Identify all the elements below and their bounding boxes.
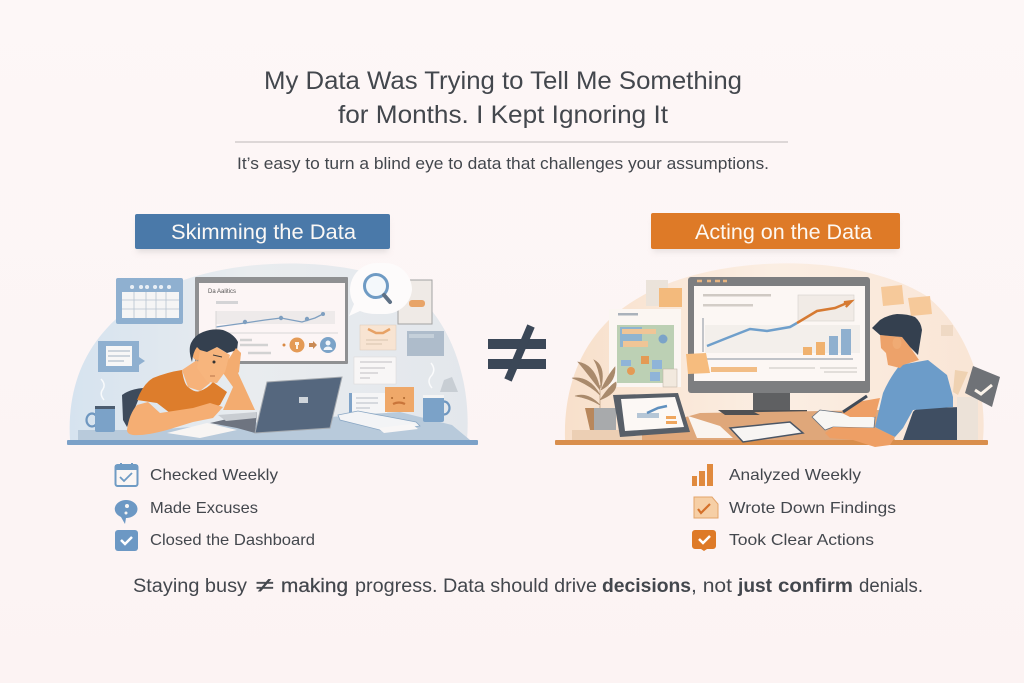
- closing statement: decisions: [602, 576, 691, 597]
- title: [264, 67, 742, 129]
- map document: [609, 309, 681, 387]
- check badge: [953, 366, 1000, 440]
- label: Took Clear Actions: [729, 532, 874, 549]
- plant: [572, 360, 616, 433]
- desk papers and sticky note: [338, 387, 420, 433]
- closing statement: Staying busy: [133, 576, 248, 597]
- checklist: acting: [692, 464, 896, 551]
- closing statement: just: [737, 576, 773, 597]
- icon: action check: [692, 530, 716, 551]
- keyboard and papers: [688, 410, 803, 442]
- wall notes: [646, 280, 953, 336]
- small sticky face: [663, 369, 677, 387]
- panel: acting on the data: [555, 213, 1000, 447]
- title: for Months. I Kept Ignoring It: [338, 101, 668, 129]
- wall notes: [354, 280, 444, 384]
- illustration: man skimming at laptop: [67, 263, 478, 445]
- laptop: [210, 377, 342, 433]
- monitor: [686, 277, 870, 415]
- label: Checked Weekly: [150, 467, 278, 484]
- analyst: [812, 314, 963, 447]
- desk: [555, 410, 988, 445]
- label: Analyzed Weekly: [729, 467, 861, 484]
- calendar: [116, 278, 183, 324]
- mug right: [423, 363, 458, 422]
- checklist: skimming: [115, 463, 315, 551]
- tablet: [613, 393, 690, 437]
- label: Made Excuses: [150, 500, 258, 517]
- analytics monitor: Da Aalitics: [208, 289, 236, 295]
- illustration: man analysing data: [555, 263, 1000, 447]
- panel: skimming the data: [67, 214, 478, 445]
- label: Closed the Dashboard: [150, 532, 315, 549]
- closing statement: [133, 575, 923, 597]
- icon: findings note: [694, 497, 718, 518]
- subtitle: It’s easy to turn a blind eye to data that challenges your assumptions.: [237, 154, 769, 173]
- label: Wrote Down Findings: [729, 500, 896, 517]
- heading pill: skimming: Skimming the Data: [171, 221, 356, 244]
- closing statement: confirm: [778, 576, 853, 597]
- analytics monitor: [195, 277, 348, 364]
- closing statement: progress. Data should drive: [355, 576, 597, 597]
- icon: bar chart: [692, 464, 713, 486]
- closing statement: , not: [691, 576, 733, 597]
- backdrop: [70, 263, 468, 440]
- chat note: [98, 341, 145, 372]
- magnifier speech bubble: [349, 263, 412, 316]
- backdrop: [565, 263, 984, 440]
- heading pill: acting: Acting on the Data: [695, 221, 872, 244]
- icon: checked box: [115, 530, 138, 551]
- title: My Data Was Trying to Tell Me Something: [264, 67, 742, 95]
- icon: excuse bubble: [115, 500, 138, 524]
- closing statement: making: [281, 576, 348, 597]
- desk: [67, 412, 478, 445]
- man: [122, 329, 255, 438]
- heading pill: skimming: [135, 214, 390, 252]
- closing statement: denials.: [859, 576, 923, 597]
- icon: calendar check: [115, 463, 138, 486]
- mug left: [86, 379, 115, 432]
- not equal sign: [488, 326, 546, 380]
- heading pill: acting: [651, 213, 900, 252]
- closing statement: ≠: [256, 575, 274, 597]
